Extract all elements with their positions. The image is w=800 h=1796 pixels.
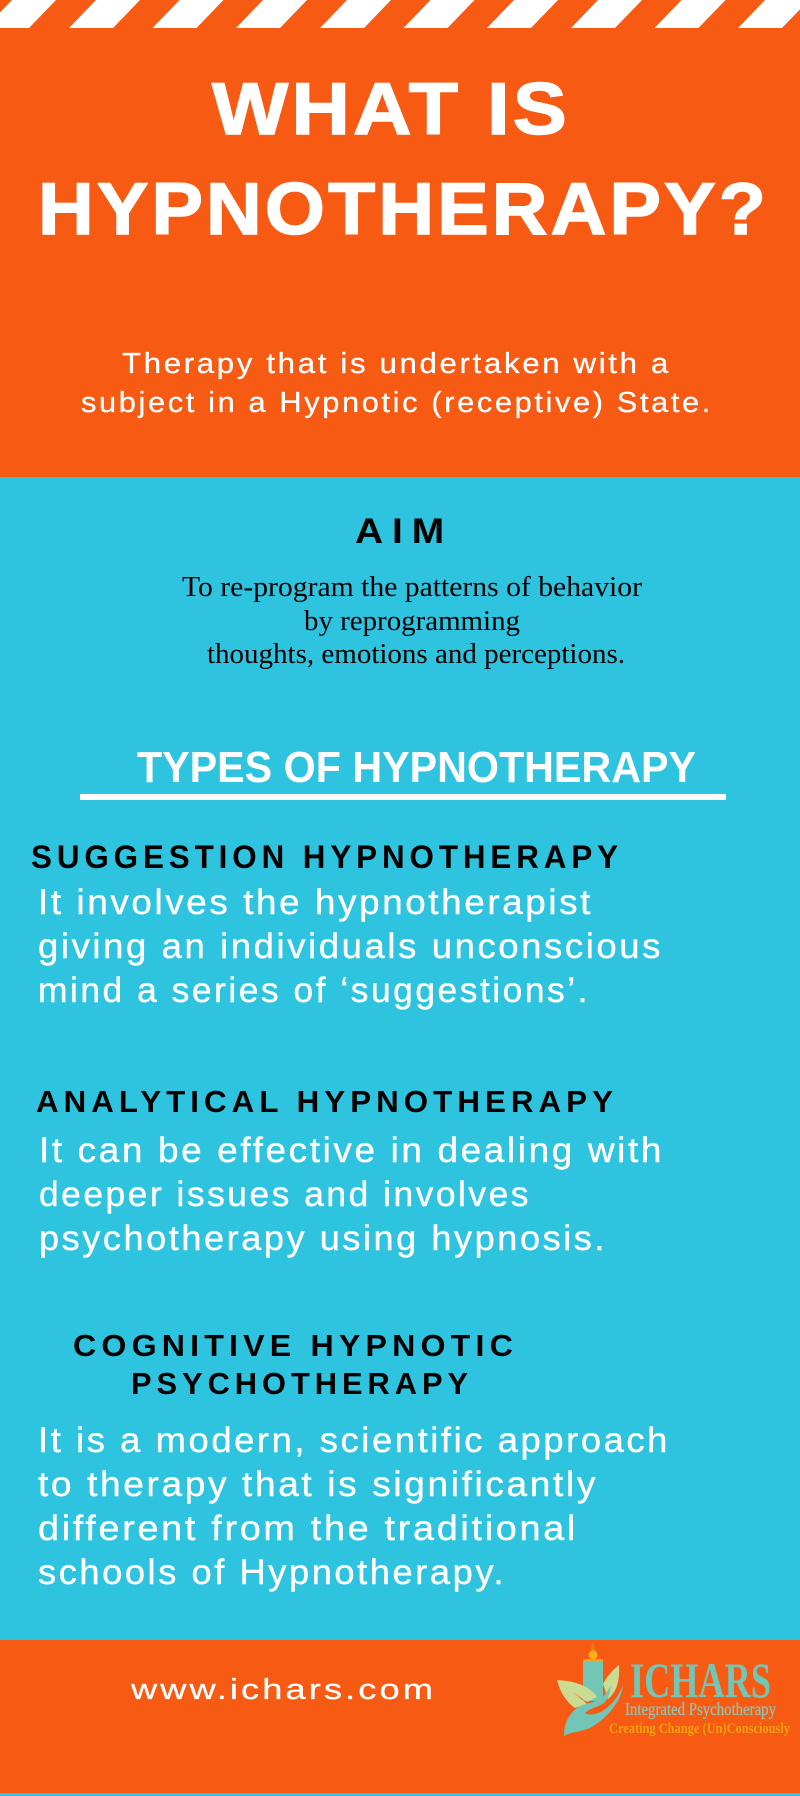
title: WHAT IS	[212, 69, 570, 150]
section: cognitive hypnotic psychotherapy: COGNITIVE HYPNOTIC	[73, 1328, 518, 1363]
icon: hand	[564, 1685, 623, 1736]
striped top border	[0, 0, 800, 28]
heading: types of hypnotherapy: TYPES OF HYPNOTHERAPY	[137, 743, 696, 792]
title	[38, 69, 769, 250]
section: analytical hypnotherapy: It can be effective in dealing with	[39, 1131, 664, 1170]
section: cognitive hypnotic psychotherapy: schools of Hypnotherapy.	[38, 1553, 506, 1592]
section: suggestion hypnotherapy: mind a series of ‘suggestions’.	[38, 971, 590, 1010]
section: analytical hypnotherapy: ANALYTICAL HYPNOTHERAPY	[36, 1084, 618, 1119]
icon: candle	[583, 1641, 603, 1701]
icon: leaves	[557, 1665, 619, 1708]
subtitle: Therapy that is undertaken with a	[122, 348, 671, 380]
section: cognitive hypnotic psychotherapy: to therapy that is significantly	[38, 1465, 598, 1504]
text: aim description: To re-program the patterns of behavior	[182, 572, 643, 603]
section: cognitive hypnotic psychotherapy: It is a modern, scientific approach	[38, 1421, 670, 1460]
section: cognitive hypnotic psychotherapy: PSYCHOTHERAPY	[131, 1366, 473, 1401]
text: aim description: thoughts, emotions and perceptions.	[207, 639, 625, 670]
panel: footer	[0, 1640, 800, 1793]
website url: www.ichars.com	[130, 1674, 436, 1706]
section: analytical hypnotherapy	[36, 1084, 664, 1258]
section: cognitive hypnotic psychotherapy: different from the traditional	[38, 1509, 578, 1548]
section: suggestion hypnotherapy: It involves the hypnotherapist	[38, 883, 593, 922]
logo: ICHARS	[557, 1641, 790, 1737]
section: cognitive hypnotic psychotherapy	[38, 1328, 670, 1592]
subtitle	[81, 348, 713, 419]
section: suggestion hypnotherapy: SUGGESTION HYPNOTHERAPY	[31, 839, 623, 875]
section: suggestion hypnotherapy: giving an individuals unconscious	[38, 927, 663, 966]
section: suggestion hypnotherapy	[31, 839, 663, 1010]
text: aim description: by reprogramming	[304, 606, 520, 637]
section: analytical hypnotherapy: psychotherapy using hypnosis.	[39, 1219, 607, 1258]
heading: aim: AIM	[355, 512, 453, 551]
subtitle: subject in a Hypnotic (receptive) State.	[81, 387, 713, 419]
panel: header	[0, 0, 800, 477]
title: HYPNOTHERAPY?	[38, 169, 769, 250]
section: analytical hypnotherapy: deeper issues and involves	[39, 1175, 531, 1214]
text: aim description	[182, 572, 643, 670]
